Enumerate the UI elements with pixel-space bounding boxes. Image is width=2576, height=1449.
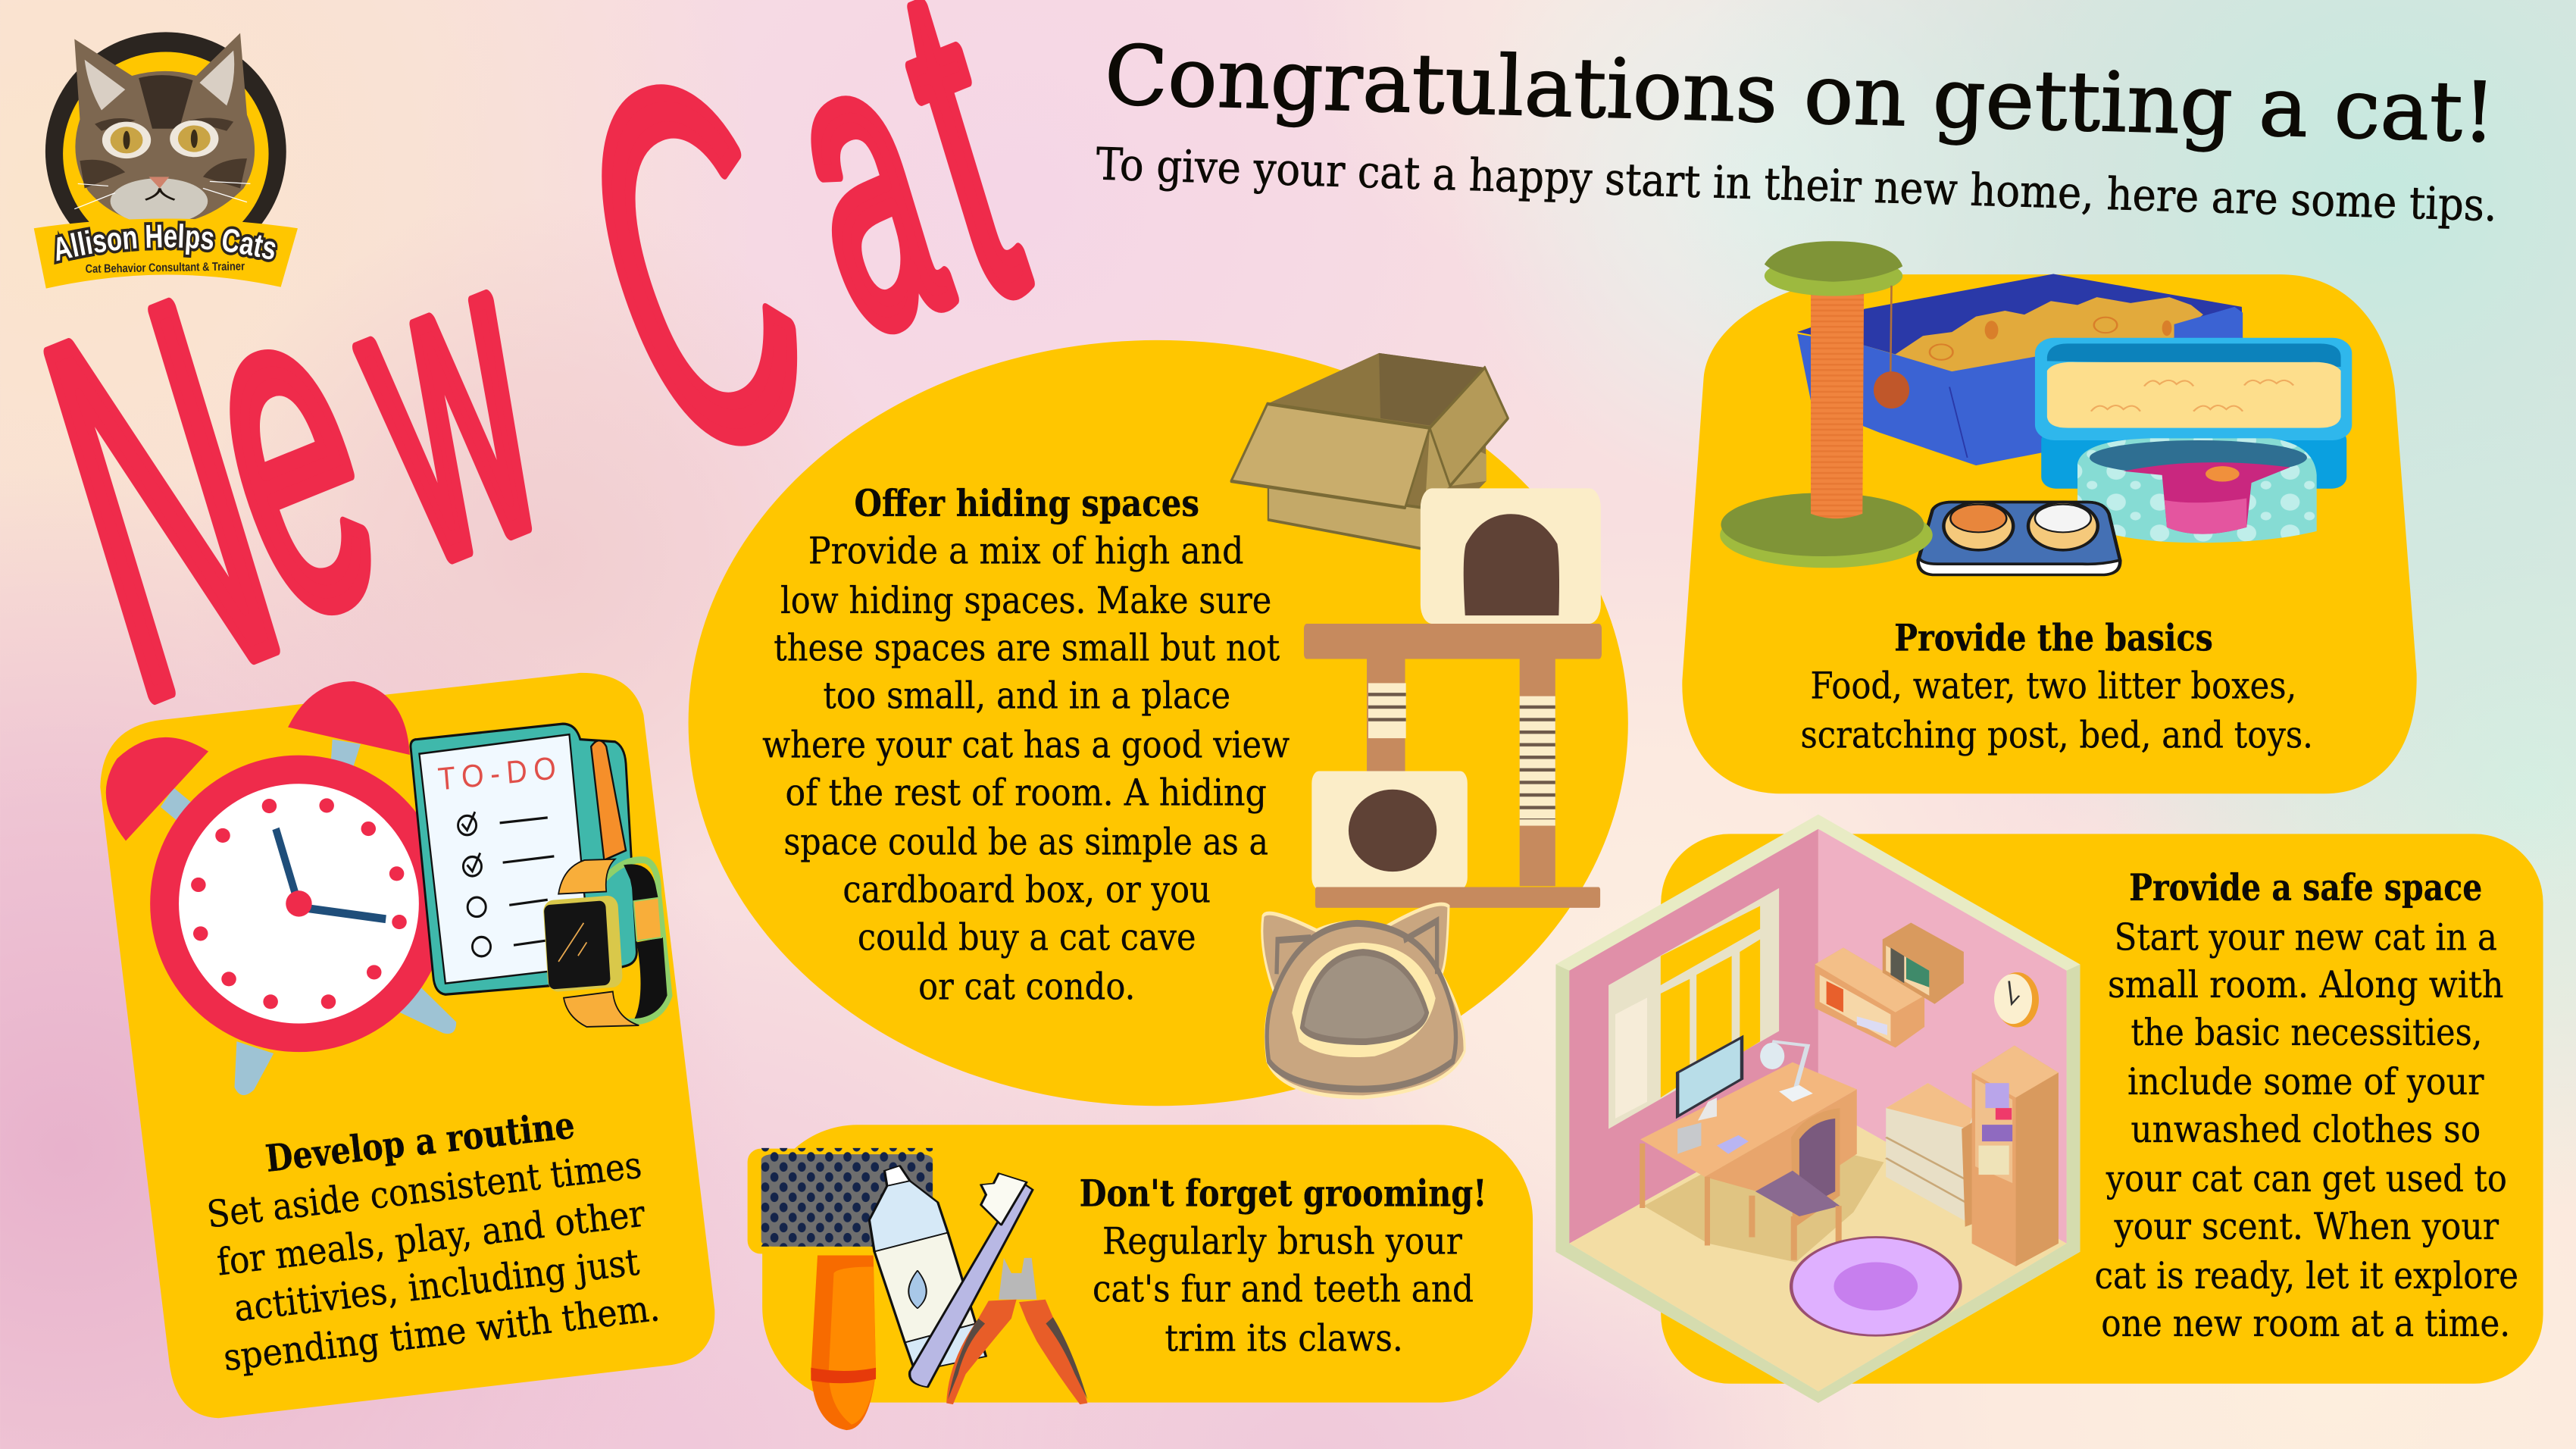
panel: develop a routine bbox=[100, 673, 714, 1418]
basics text: Provide the basics bbox=[1894, 616, 2213, 660]
dresser and bookcase bbox=[1886, 1046, 2059, 1266]
rug bbox=[1791, 1238, 1960, 1335]
icon: to-do list notebook: TO-DO bbox=[436, 751, 558, 797]
hiding spaces text bbox=[762, 481, 1290, 1008]
icon: to-do list notebook bbox=[411, 724, 636, 994]
icon: cardboard box bbox=[1231, 353, 1508, 549]
heading: congratulations: Congratulations on getting a cat! bbox=[1103, 27, 2497, 161]
grooming text: cat's fur and teeth and bbox=[1093, 1267, 1474, 1310]
safe space text: unwashed clothes so bbox=[2131, 1108, 2481, 1151]
grooming text: Don't forget grooming! bbox=[1080, 1172, 1487, 1216]
safe space text: your cat can get used to bbox=[2106, 1157, 2507, 1200]
hiding spaces text: Offer hiding spaces bbox=[855, 481, 1199, 525]
icon: toothpaste tube bbox=[869, 1166, 986, 1372]
safe space text: include some of your bbox=[2127, 1060, 2484, 1103]
panel: don't forget grooming bbox=[748, 1125, 1533, 1430]
routine text: spending time with them. bbox=[221, 1286, 662, 1379]
icon: smart watch bbox=[542, 859, 669, 1027]
window bbox=[1608, 888, 1779, 1129]
icon: cat cave bbox=[1262, 904, 1465, 1097]
grooming text: trim its claws. bbox=[1165, 1316, 1403, 1360]
title: New Cat script lettering bbox=[0, 0, 1111, 801]
safe space text: the basic necessities, bbox=[2131, 1011, 2482, 1054]
basics illustration: litter boxes, post, bowls, bed bbox=[1720, 241, 2352, 574]
hiding spaces text: cardboard box, or you bbox=[843, 868, 1211, 911]
wall shelves bbox=[1815, 923, 1964, 1047]
wall clock bbox=[1994, 972, 2039, 1027]
routine text bbox=[205, 1103, 662, 1379]
logo tagline: Cat Behavior Consultant & Trainer bbox=[86, 260, 245, 276]
hiding spaces text: Provide a mix of high and bbox=[808, 530, 1243, 573]
routine text: Set aside consistent times bbox=[205, 1144, 644, 1237]
hiding spaces text: or cat condo. bbox=[918, 965, 1135, 1008]
panel: offer hiding spaces bbox=[689, 340, 1628, 1106]
blue litter box bbox=[1797, 274, 2243, 465]
hiding spaces text: space could be as simple as a bbox=[783, 821, 1268, 864]
food and water bowls bbox=[1918, 502, 2120, 574]
routine text: actitivies, including just bbox=[232, 1241, 642, 1330]
blue tray with sand bbox=[2035, 338, 2352, 489]
icon: slicker brush bbox=[761, 1148, 933, 1430]
safe space text bbox=[2095, 865, 2518, 1345]
title: New Cat script lettering: w bbox=[289, 150, 608, 646]
safe space text: Provide a safe space bbox=[2129, 865, 2482, 909]
scratching post bbox=[1720, 241, 1933, 568]
hiding spaces text: these spaces are small but not bbox=[774, 627, 1280, 670]
chair bbox=[1752, 1108, 1840, 1260]
icon: nail clippers bbox=[946, 1258, 1087, 1404]
hiding spaces text: too small, and in a place bbox=[823, 674, 1230, 718]
grooming text bbox=[1080, 1172, 1487, 1360]
hiding spaces text: of the rest of room. A hiding bbox=[786, 771, 1267, 814]
title: New Cat script lettering: e bbox=[132, 181, 440, 713]
routine text: for meals, play, and other bbox=[214, 1192, 648, 1285]
logo: Allison Helps Cats bbox=[33, 32, 298, 289]
icon: toothbrush bbox=[910, 1173, 1033, 1387]
safe space text: cat is ready, let it explore bbox=[2095, 1254, 2518, 1297]
desk and computer bbox=[1640, 1037, 1857, 1246]
safe space text: small room. Along with bbox=[2108, 963, 2504, 1006]
pet bed bbox=[2077, 438, 2317, 543]
logo name: Allison Helps Cats bbox=[54, 221, 277, 265]
hiding spaces text: could buy a cat cave bbox=[858, 915, 1196, 959]
routine text: Develop a routine bbox=[264, 1103, 577, 1181]
panel: provide a safe space bbox=[1555, 815, 2543, 1403]
safe space text: your scent. When your bbox=[2114, 1205, 2499, 1248]
grooming text: Regularly brush your bbox=[1102, 1219, 1462, 1263]
panel: provide the basics bbox=[1682, 241, 2417, 793]
safe space text: Start your new cat in a bbox=[2115, 915, 2497, 959]
hiding spaces text: low hiding spaces. Make sure bbox=[780, 579, 1271, 622]
basics text bbox=[1801, 616, 2313, 757]
icon: cat tree condo bbox=[1304, 488, 1602, 908]
isometric room illustration bbox=[1555, 815, 2080, 1403]
safe space text: one new room at a time. bbox=[2101, 1302, 2510, 1345]
basics text: scratching post, bed, and toys. bbox=[1801, 714, 2313, 757]
hiding spaces text: where your cat has a good view bbox=[762, 724, 1290, 767]
basics text: Food, water, two litter boxes, bbox=[1811, 665, 2296, 708]
icon: alarm clock bbox=[106, 681, 456, 1095]
